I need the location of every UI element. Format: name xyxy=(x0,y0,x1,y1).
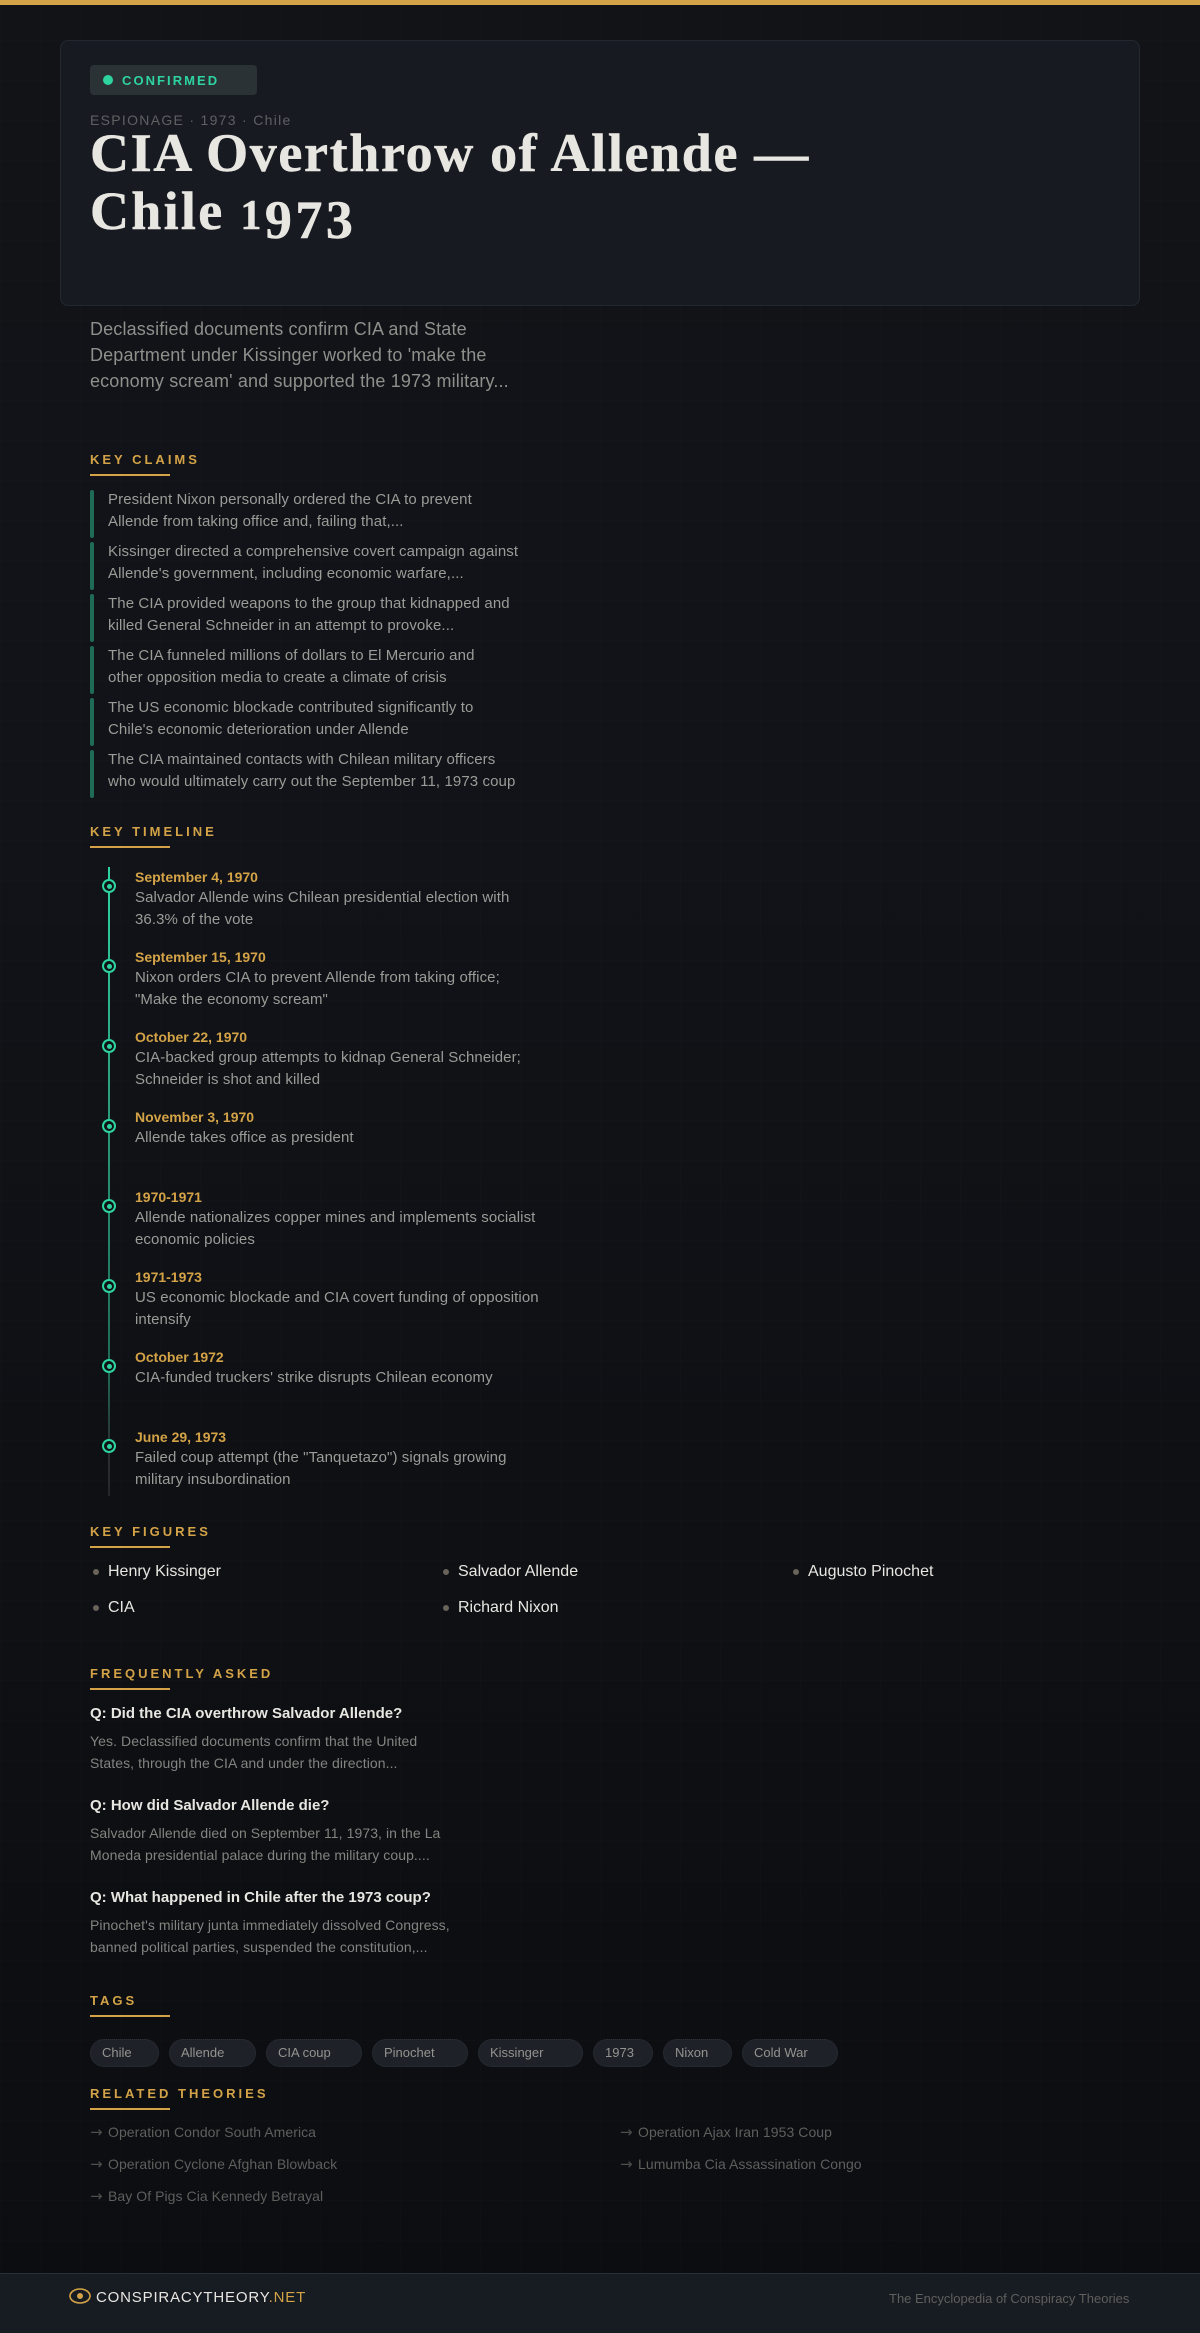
event: June 29, 1973 xyxy=(102,1429,507,1488)
intro text xyxy=(90,319,509,391)
link: Lumumba Cia Assassination Congo: Lumumba Cia Assassination Congo xyxy=(638,2156,862,2172)
event: November 3, 1970: November 3, 1970 xyxy=(135,1109,254,1125)
claim 5: Chile's economic deterioration under Allende xyxy=(108,721,409,738)
event: October 1972: October 1972 xyxy=(135,1349,224,1365)
claim 2 xyxy=(90,542,518,590)
event: September 15, 1970: "Make the economy scream" xyxy=(135,991,328,1008)
section: key figures xyxy=(90,1524,934,1616)
title xyxy=(90,123,810,250)
event: 1970-1971: Allende nationalizes copper mines and implements socialist xyxy=(135,1209,535,1226)
claim 6 xyxy=(90,750,515,798)
tag: CIA coup: CIA coup xyxy=(278,2045,331,2060)
claim 3 xyxy=(90,594,510,642)
title: Chile 1973 xyxy=(90,181,356,250)
faq 2 xyxy=(90,1797,440,1863)
event: October 22, 1970: October 22, 1970 xyxy=(135,1029,247,1045)
claim 4: other opposition media to create a climate of crisis xyxy=(108,669,447,686)
event: 1970-1971 xyxy=(102,1189,536,1248)
event: 1971-1973 xyxy=(102,1269,539,1328)
heading: key claims: KEY CLAIMS xyxy=(90,452,200,467)
icon: eye logo xyxy=(69,2288,91,2304)
tag: Kissinger xyxy=(478,2039,583,2067)
event: September 4, 1970: September 4, 1970 xyxy=(135,869,258,885)
link: Operation Cyclone Afghan Blowback: Operation Cyclone Afghan Blowback xyxy=(108,2156,337,2172)
panel: hero header xyxy=(60,40,1140,306)
link: Operation Ajax Iran 1953 Coup: → xyxy=(620,2123,633,2141)
event: September 15, 1970 xyxy=(102,949,500,1008)
claim 2: Allende's government, including economic warfare,... xyxy=(108,565,464,582)
claim 6: The CIA maintained contacts with Chilean military officers xyxy=(108,751,495,768)
timeline spine xyxy=(108,867,110,1496)
event: September 15, 1970: September 15, 1970 xyxy=(135,949,266,965)
event: October 22, 1970: Schneider is shot and killed xyxy=(135,1071,320,1088)
event: June 29, 1973: Failed coup attempt (the "Tanquetazo") signals growing xyxy=(135,1449,507,1466)
footer xyxy=(0,2273,1200,2333)
tag: Allende: Allende xyxy=(181,2045,224,2060)
faq 2: Salvador Allende died on September 11, 1973, in the La xyxy=(90,1825,440,1841)
claim 1: Allende from taking office and, failing that,... xyxy=(108,513,404,530)
link: Operation Condor South America: Operation Condor South America xyxy=(108,2124,316,2140)
faq 3: Q: What happened in Chile after the 1973 coup? xyxy=(90,1889,431,1906)
tag: Cold War: Cold War xyxy=(754,2045,808,2060)
event: October 1972: CIA-funded truckers' strike disrupts Chilean economy xyxy=(135,1369,493,1386)
claim 4: The CIA funneled millions of dollars to El Mercurio and xyxy=(108,647,475,664)
tag: Nixon xyxy=(663,2039,732,2067)
heading: frequently asked: FREQUENTLY ASKED xyxy=(90,1666,273,1681)
event: November 3, 1970 xyxy=(102,1109,354,1146)
event: November 3, 1970: Allende takes office as president xyxy=(135,1129,354,1146)
link: Lumumba Cia Assassination Congo: → xyxy=(620,2155,633,2173)
event: 1971-1973: US economic blockade and CIA covert funding of opposition xyxy=(135,1289,539,1306)
event: September 4, 1970: Salvador Allende wins Chilean presidential election with xyxy=(135,889,509,906)
tag: Pinochet xyxy=(372,2039,468,2067)
claim 4 xyxy=(90,646,475,694)
section: tags xyxy=(90,1993,838,2067)
figure: Augusto Pinochet: Augusto Pinochet xyxy=(808,1563,933,1580)
faq 1: States, through the CIA and under the direction... xyxy=(90,1755,398,1771)
event: October 22, 1970: CIA-backed group attempts to kidnap General Schneider; xyxy=(135,1049,521,1066)
icon: status dot xyxy=(103,75,113,85)
faq 1: Yes. Declassified documents confirm that the United xyxy=(90,1733,417,1749)
event: June 29, 1973: military insubordination xyxy=(135,1471,291,1488)
figure: Henry Kissinger: Henry Kissinger xyxy=(108,1563,221,1580)
heading: key timeline: KEY TIMELINE xyxy=(90,824,217,839)
event: 1970-1971: 1970-1971 xyxy=(135,1189,202,1205)
tag: Allende xyxy=(169,2039,256,2067)
figure: Salvador Allende: Salvador Allende xyxy=(458,1563,578,1580)
link: Bay Of Pigs Cia Kennedy Betrayal: Bay Of Pigs Cia Kennedy Betrayal xyxy=(108,2188,323,2204)
top accent bar xyxy=(0,0,1200,5)
link: Bay Of Pigs Cia Kennedy Betrayal: → xyxy=(90,2187,103,2205)
tag: Chile: Chile xyxy=(102,2045,132,2060)
category eyebrow: ESPIONAGE · 1973 · Chile xyxy=(90,112,292,128)
event: 1970-1971: economic policies xyxy=(135,1231,255,1248)
section: key timeline xyxy=(90,824,539,1496)
link: Operation Cyclone Afghan Blowback: → xyxy=(90,2155,103,2173)
tag: 1973: 1973 xyxy=(605,2045,634,2060)
claim 5: The US economic blockade contributed significantly to xyxy=(108,699,474,716)
heading: tags: TAGS xyxy=(90,1993,137,2008)
intro text: Department under Kissinger worked to 'make the xyxy=(90,345,487,365)
event: September 4, 1970: 36.3% of the vote xyxy=(135,911,253,928)
faq 1 xyxy=(90,1705,417,1771)
tag: Kissinger: Kissinger xyxy=(490,2045,543,2060)
tag: Pinochet: Pinochet xyxy=(384,2045,435,2060)
figure: CIA xyxy=(93,1599,135,1616)
event: September 4, 1970 xyxy=(102,869,509,928)
claim 3: killed General Schneider in an attempt to provoke... xyxy=(108,617,454,634)
heading: key figures: KEY FIGURES xyxy=(90,1524,211,1539)
heading: related theories: RELATED THEORIES xyxy=(90,2086,268,2101)
faq 1: Q: Did the CIA overthrow Salvador Allende? xyxy=(90,1705,402,1722)
section: key claims xyxy=(90,452,518,798)
faq 3: Pinochet's military junta immediately dissolved Congress, xyxy=(90,1917,450,1933)
intro text: economy scream' and supported the 1973 military... xyxy=(90,371,509,391)
faq 3: banned political parties, suspended the constitution,... xyxy=(90,1939,428,1955)
link: Operation Ajax Iran 1953 Coup: Operation Ajax Iran 1953 Coup xyxy=(638,2124,832,2140)
faq 2: Q: How did Salvador Allende die? xyxy=(90,1797,329,1814)
event: 1971-1973: 1971-1973 xyxy=(135,1269,202,1285)
tag: Cold War xyxy=(742,2039,838,2067)
title: CIA Overthrow of Allende — xyxy=(90,123,810,183)
section: related theories xyxy=(90,2086,862,2205)
link: Bay Of Pigs Cia Kennedy Betrayal xyxy=(90,2185,450,2207)
claim 3: The CIA provided weapons to the group that kidnapped and xyxy=(108,595,510,612)
event: October 22, 1970 xyxy=(102,1029,521,1088)
status badge: confirmed: CONFIRMED xyxy=(122,73,219,88)
tag: Chile xyxy=(90,2039,159,2067)
footer tagline: The Encyclopedia of Conspiracy Theories xyxy=(889,2291,1129,2306)
claim 1: President Nixon personally ordered the CIA to prevent xyxy=(108,491,472,508)
event: October 1972 xyxy=(102,1349,493,1386)
figure: Richard Nixon: Richard Nixon xyxy=(458,1599,558,1616)
figure: CIA: CIA xyxy=(108,1599,135,1616)
section: frequently asked xyxy=(90,1666,450,1955)
event: June 29, 1973: June 29, 1973 xyxy=(135,1429,226,1445)
faq 2: Moneda presidential palace during the military coup.... xyxy=(90,1847,430,1863)
tag: CIA coup xyxy=(266,2039,362,2067)
link: Operation Condor South America: → xyxy=(90,2123,103,2141)
status badge: confirmed xyxy=(90,65,257,95)
claim 2: Kissinger directed a comprehensive covert campaign against xyxy=(108,543,518,560)
claim 1 xyxy=(90,490,472,538)
tag: 1973 xyxy=(593,2039,653,2067)
claim 5 xyxy=(90,698,474,746)
faq 3 xyxy=(90,1889,450,1955)
tag: Nixon: Nixon xyxy=(675,2045,708,2060)
event: 1971-1973: intensify xyxy=(135,1311,191,1328)
claim 6: who would ultimately carry out the September 11, 1973 coup xyxy=(108,773,515,790)
event: September 15, 1970: Nixon orders CIA to prevent Allende from taking office; xyxy=(135,969,500,986)
brand wordmark: CONSPIRACYTHEORY.NET xyxy=(96,2289,306,2306)
intro text: Declassified documents confirm CIA and State xyxy=(90,319,467,339)
